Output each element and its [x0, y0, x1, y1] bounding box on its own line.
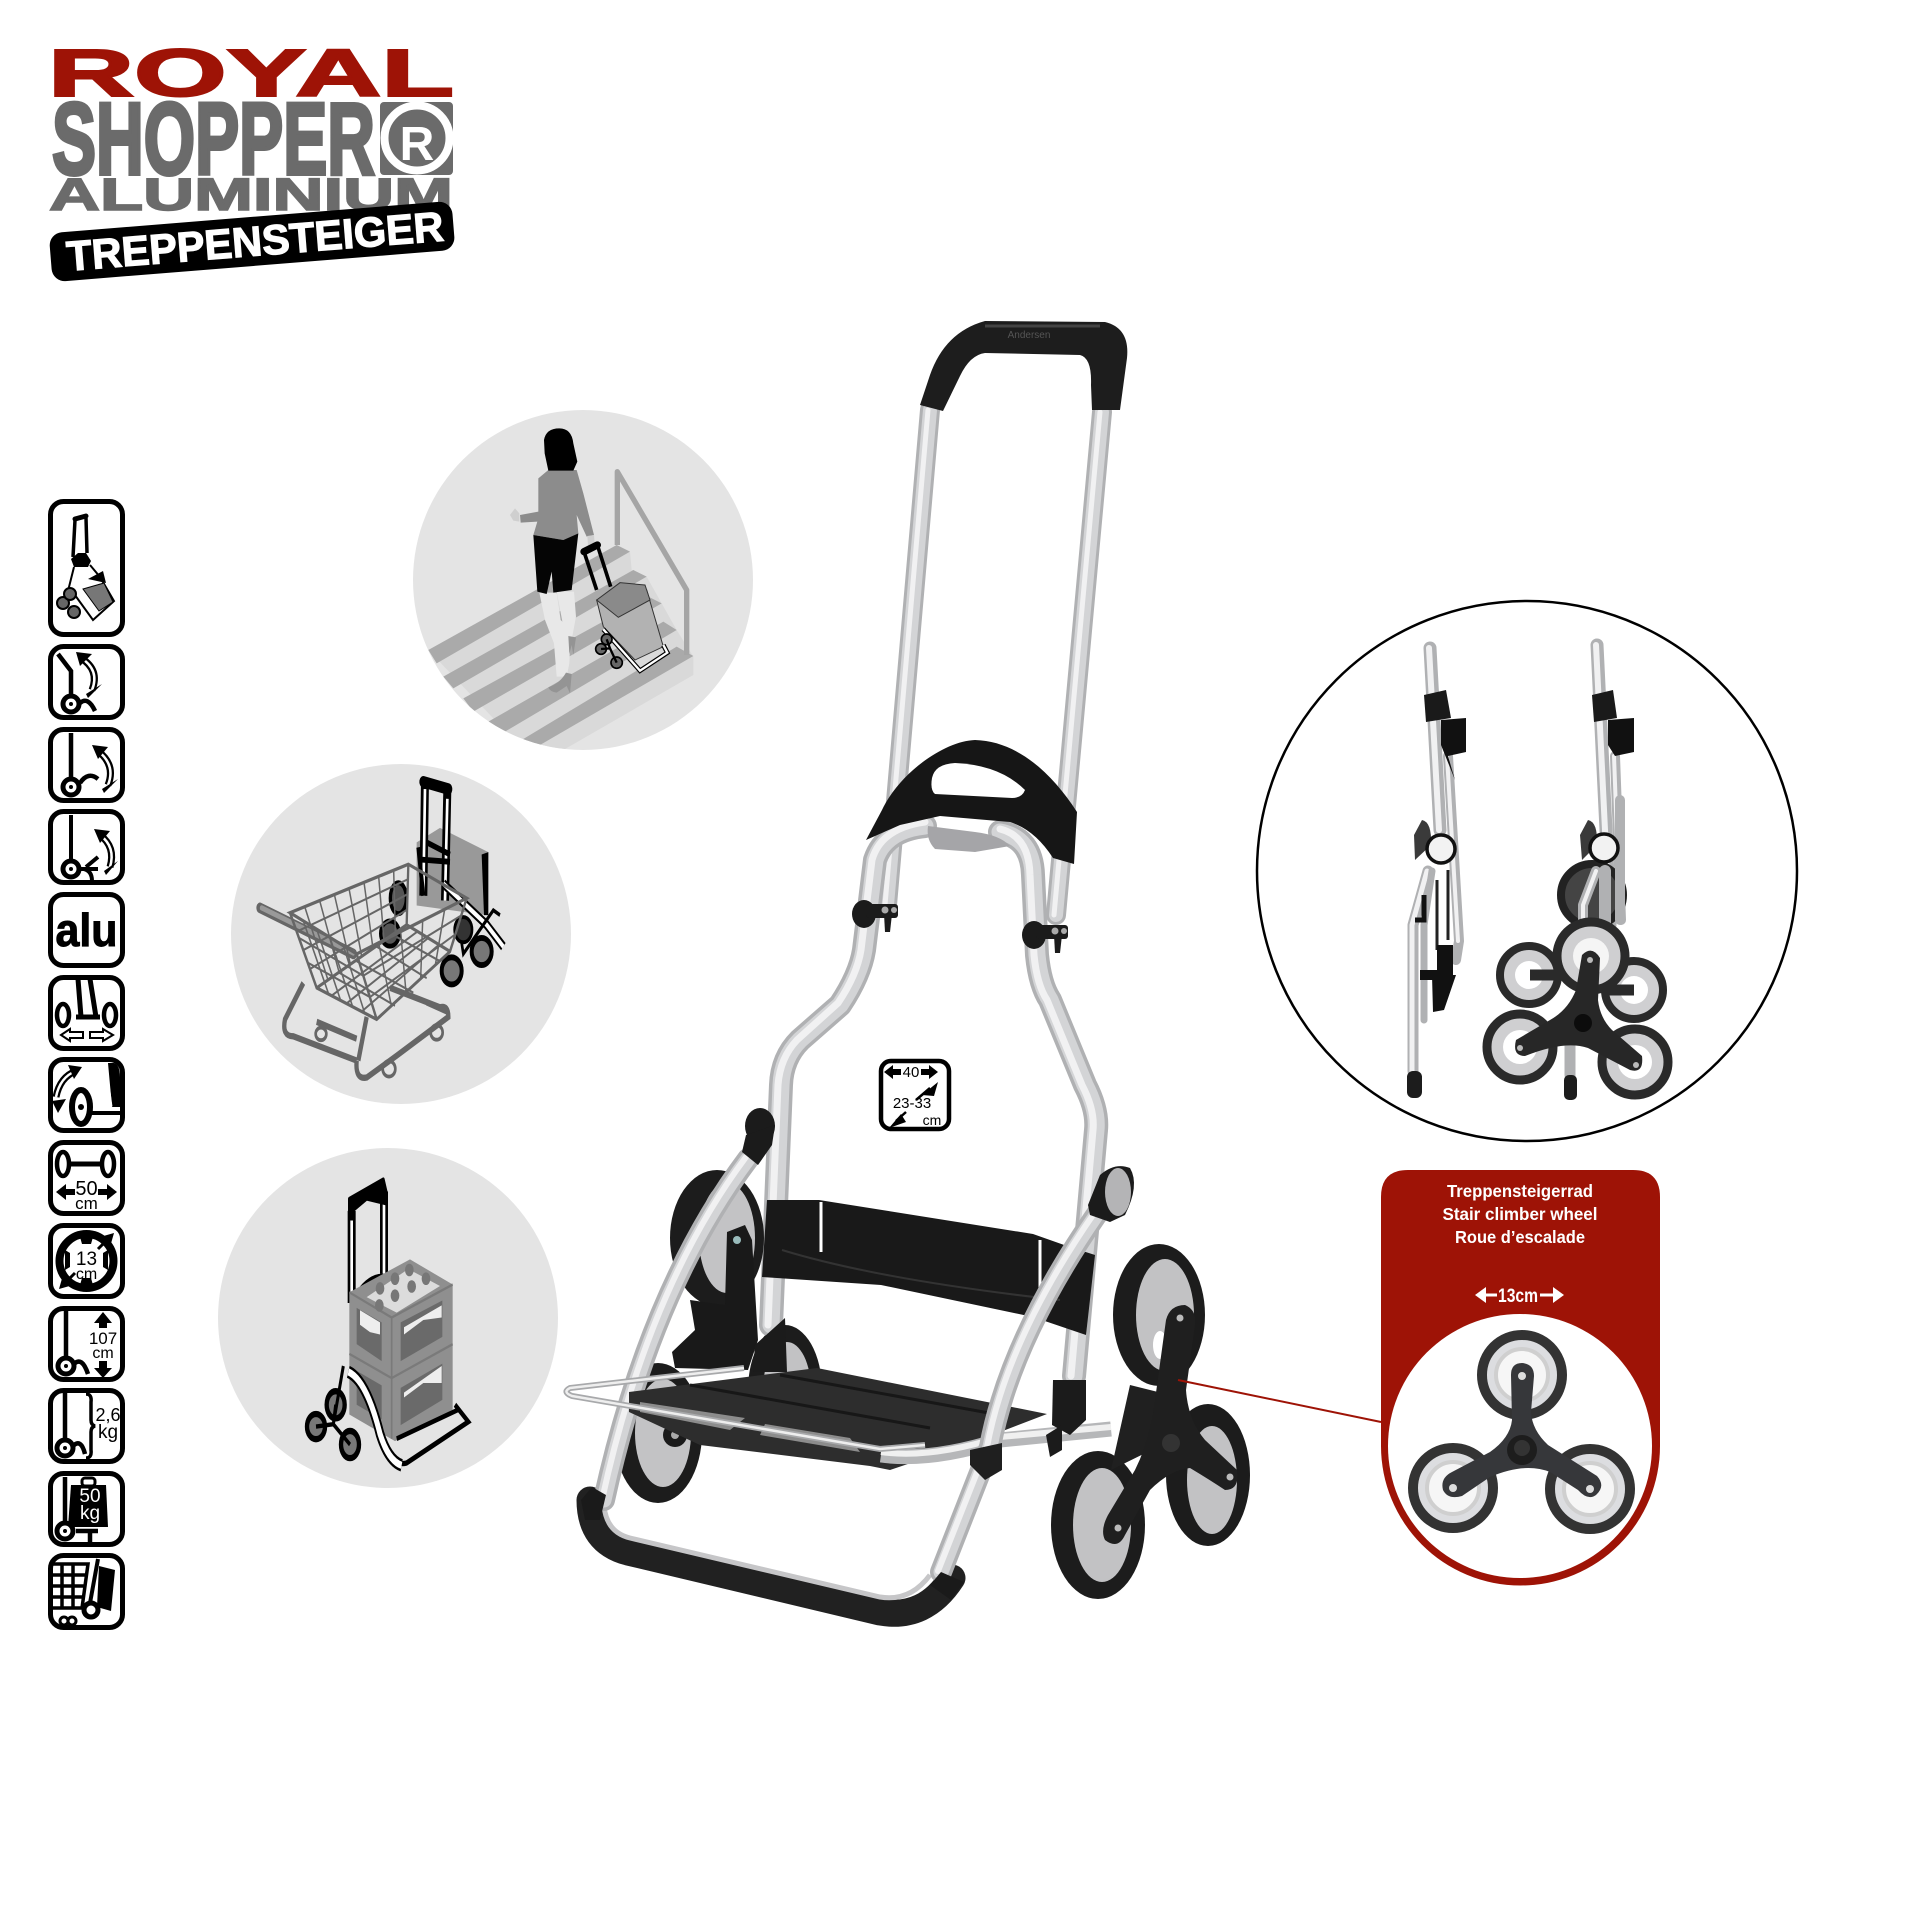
icon: 50 cm axle: 50: [75, 1178, 98, 1200]
woman figure: [510, 428, 595, 693]
icon: 13 cm wheel: cm: [76, 1266, 97, 1283]
icon: lower hook tilt: [50, 730, 122, 800]
icon: 50 kg load: [50, 1474, 122, 1544]
carry handle: [866, 740, 1077, 864]
icon: 50 kg load: 50: [79, 1486, 101, 1507]
icon: 107 cm height: 107: [89, 1329, 117, 1348]
stair steps: [428, 545, 693, 750]
13 cm dimension: [1475, 1286, 1564, 1307]
callout title lines: [1442, 1181, 1598, 1247]
icon: aluminium: alu: [56, 904, 118, 956]
callout title lines: Treppensteigerrad: [1447, 1181, 1593, 1201]
seat mesh: [629, 1368, 1047, 1470]
logo word: ROYAL: ROYAL: [48, 36, 454, 111]
icon: 107 cm height: cm: [92, 1345, 114, 1362]
dimension icon: 40 x 23-33 cm: cm: [923, 1112, 941, 1128]
leader line to stair climber wheel: [1178, 1380, 1381, 1422]
frame, foot plate and wheels: [307, 1366, 468, 1465]
icon: 2.6 kg weight: 2,6: [95, 1405, 121, 1425]
telescopic upper tubes: [885, 410, 1102, 915]
dimension icon: 40 x 23-33 cm: 40: [903, 1064, 919, 1081]
folded side view: [1407, 648, 1466, 1098]
tube clamps: [852, 900, 1068, 953]
icon: 13 cm wheel: 13: [76, 1249, 97, 1270]
lower frame tubes: [768, 822, 1096, 1376]
icon: aluminium: [50, 894, 122, 966]
icon: foot plate tilt: [50, 812, 122, 882]
black trolley with bag: [381, 779, 503, 984]
handle grip: Andersen: [1008, 330, 1050, 341]
dimension icon: 40 x 23-33 cm: 23-33: [893, 1095, 931, 1112]
illustration: trolley carrying bottle crates: [218, 1148, 558, 1488]
white wheel circle: [1388, 1314, 1652, 1578]
stair rail: [617, 472, 687, 655]
icon: wheel track width: [50, 978, 122, 1048]
stair climber wheel set: [1413, 1335, 1630, 1529]
13 cm dimension: 13cm: [1498, 1286, 1538, 1307]
foot plate: [590, 1500, 952, 1613]
foot plate wire and cross tube: [566, 1368, 1111, 1457]
front right stair climber wheels: [1051, 1244, 1250, 1599]
illustration: trolley behind shopping cart: [231, 764, 571, 1104]
frame hinges and knobs: [581, 1108, 1134, 1600]
icon: 107 cm height: [50, 1308, 122, 1380]
icon: trolley overview: [50, 502, 122, 634]
dimension icon: 40 x 23-33 cm: [881, 1061, 949, 1129]
handle: [349, 1179, 387, 1303]
callout: stair climber wheel: [1381, 1170, 1660, 1586]
logo banner: TREPPENSTEIGER: TREPPENSTEIGER: [65, 203, 445, 280]
icon: 2.6 kg weight: kg: [98, 1422, 118, 1443]
icon: 2.6 kg weight: [50, 1390, 122, 1462]
registered mark: [380, 102, 453, 175]
front left arm: [602, 1157, 748, 1500]
logo word: ALUMINIUM: ALUMINIUM: [49, 169, 453, 220]
illustration: woman pulling trolley up stairs: [413, 410, 753, 750]
callout title lines: Stair climber wheel: [1442, 1204, 1598, 1224]
back rest: [762, 1200, 1095, 1335]
icon: 50 cm axle: cm: [75, 1194, 98, 1213]
rear wheel: [748, 1325, 822, 1455]
rear left stair climber wheels: [614, 1170, 764, 1503]
feature icon column: [50, 502, 122, 1628]
folded front view with wheels: [1487, 645, 1668, 1100]
icon: 50 kg load: kg: [80, 1503, 100, 1524]
icon: trolley in shopping cart: [50, 1556, 122, 1628]
icon: handle tilt: [50, 646, 122, 718]
icon: 50 cm axle: [50, 1142, 122, 1214]
logo word: SHOPPER: SHOPPER: [52, 82, 375, 196]
icon: wheel turn: [50, 1060, 122, 1130]
red callout panel: [1381, 1170, 1660, 1586]
callout: folded trolley views: [1257, 601, 1797, 1141]
small trolley on stairs: [584, 545, 667, 671]
handle grip: [920, 321, 1127, 411]
logo: [48, 36, 455, 282]
registered mark: R: [400, 118, 434, 171]
crates: [349, 1259, 453, 1441]
icon: 13 cm wheel: [50, 1226, 122, 1296]
front right arm: [938, 1212, 1097, 1572]
shopping cart: [260, 864, 467, 1078]
callout title lines: Roue d’escalade: [1455, 1227, 1585, 1247]
main product photo: aluminium trolley frame: [566, 321, 1250, 1613]
